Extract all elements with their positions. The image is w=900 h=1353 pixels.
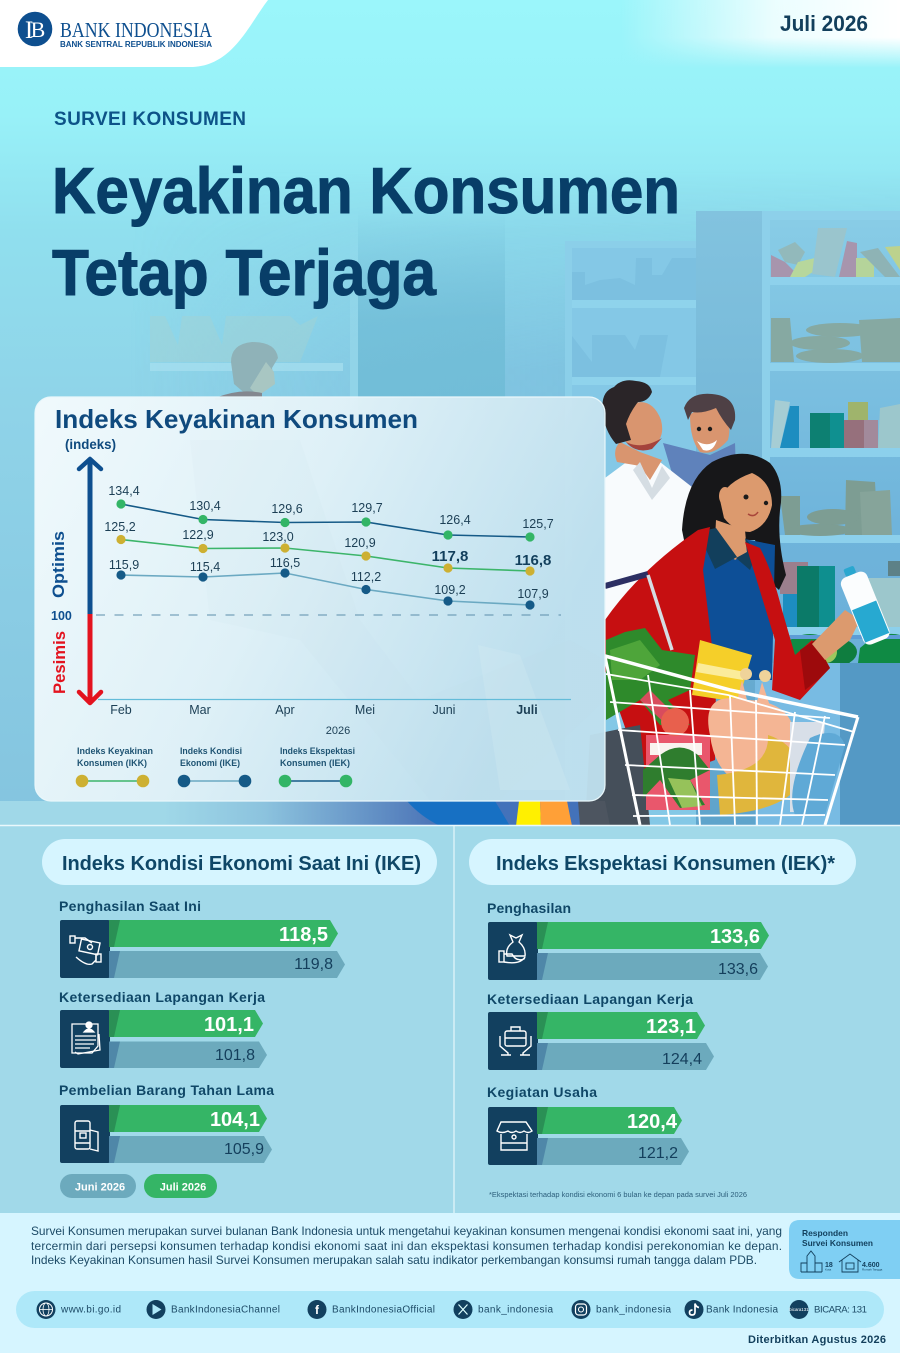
background illustration: faint left shelf and shopper <box>150 316 343 400</box>
man <box>602 380 737 640</box>
social bar: BICARA: 131 <box>814 1304 867 1316</box>
icon: tiktok <box>684 1300 704 1319</box>
description text: Survei Konsumen merupakan survei bulanan Bank Indonesia untuk mengetahui keyakinan konsumen mengenai kondisi ekonomi saat ini, yang <box>31 1224 782 1238</box>
series IKE: 115,9 <box>109 558 139 572</box>
shelf 1 goods <box>771 255 800 277</box>
groceries <box>606 628 845 815</box>
IEK heading: Indeks Ekspektasi Konsumen (IEK)* <box>496 853 835 875</box>
IKE item: Ketersediaan Lapangan Kerja: 101,1 <box>204 1014 254 1036</box>
IKE item: Ketersediaan Lapangan Kerja <box>59 989 267 1068</box>
month labels: Juni <box>433 703 455 717</box>
icon: facebook: f <box>315 1303 320 1317</box>
IKE item: Ketersediaan Lapangan Kerja: 101,8 <box>215 1047 255 1064</box>
background illustration: store shelves <box>350 210 900 848</box>
legend pills <box>60 1174 217 1198</box>
shelf 2 goods <box>771 318 794 362</box>
legend <box>76 746 355 787</box>
icon: facebook <box>308 1300 326 1319</box>
social bar: Bank Indonesia <box>706 1304 778 1316</box>
series IKK: 123,0 <box>262 530 294 544</box>
IKE item: Penghasilan Saat Ini: 118,5 <box>279 924 328 946</box>
header logo panel <box>0 0 268 67</box>
illustration: family shopping <box>0 380 892 826</box>
shelf 4 goods <box>780 496 800 535</box>
icon: city <box>801 1251 822 1272</box>
shelf 5 goods <box>780 562 808 594</box>
chart title: Indeks Keyakinan Konsumen <box>55 404 418 434</box>
description text: tercermin dari persepsi konsumen terhadap kondisi ekonomi saat ini dan ekspektasi konsumen terhadap kondisi perekonomian ke depan. <box>31 1239 782 1253</box>
IEK item: Penghasilan: Penghasilan <box>487 900 571 916</box>
series IEK: 129,7 <box>351 501 383 515</box>
woman hair <box>682 454 786 590</box>
page background <box>0 0 900 826</box>
series IKK <box>104 520 551 576</box>
IEK item: Kegiatan Usaha <box>487 1084 689 1165</box>
month labels: Apr <box>275 703 295 717</box>
respondent box: 18 <box>825 1262 833 1269</box>
series IEK: 126,4 <box>439 513 471 527</box>
IKE item: Pembelian Barang Tahan Lama: 104,1 <box>210 1109 260 1131</box>
footer background <box>0 1213 900 1353</box>
IEK item: Ketersediaan Lapangan Kerja: Ketersediaan Lapangan Kerja <box>487 991 693 1007</box>
woman face <box>719 473 772 532</box>
legend: Ekonomi (IKE) <box>180 758 240 768</box>
woman jacket <box>605 527 716 780</box>
month labels: 2026 <box>326 725 350 737</box>
IKE item: Pembelian Barang Tahan Lama <box>59 1082 274 1163</box>
IEK heading <box>469 839 856 885</box>
IEK item: Ketersediaan Lapangan Kerja <box>487 991 714 1070</box>
social bar: BankIndonesiaChannel <box>171 1304 280 1316</box>
icon: youtube <box>146 1300 166 1319</box>
pants <box>585 725 650 825</box>
month labels: Juli <box>516 703 538 717</box>
series IKE: 109,2 <box>434 583 466 597</box>
series IKK: 116,8 <box>515 552 551 569</box>
boy <box>684 394 735 453</box>
respondent box <box>789 1220 900 1279</box>
icon: refrigerator <box>75 1121 98 1151</box>
icon: website <box>36 1300 56 1319</box>
series IKK: 117,8 <box>432 548 468 565</box>
IEK item: Kegiatan Usaha: 120,4 <box>627 1111 678 1133</box>
chart card <box>35 397 605 801</box>
legend pills: Juli 2026 <box>160 1182 206 1194</box>
legend pills: Juni 2026 <box>75 1182 125 1194</box>
series IKE: 115,4 <box>190 560 220 574</box>
date: Juli 2026 <box>780 11 868 36</box>
main title: Keyakinan Konsumen <box>52 154 680 227</box>
logo mark <box>18 12 52 46</box>
social bar: bank_indonesia <box>478 1304 553 1316</box>
panel: IEK <box>469 839 856 1199</box>
top right glow <box>620 0 900 68</box>
icon: money in hand <box>70 936 101 964</box>
IEK item: Penghasilan: 133,6 <box>718 961 758 978</box>
icon: document <box>72 1022 100 1054</box>
IEK item: Penghasilan <box>487 900 769 980</box>
IKE heading <box>42 839 437 885</box>
main title: Tetap Terjaga <box>52 236 437 309</box>
IKE item: Pembelian Barang Tahan Lama: 105,9 <box>224 1141 264 1158</box>
lower panel background <box>0 826 900 1214</box>
produce row <box>790 634 850 663</box>
line chart: Pesimis <box>51 631 69 694</box>
legend: Konsumen (IKK) <box>77 758 147 768</box>
respondent box: Rumah Tangga <box>862 1268 883 1272</box>
header logo panel: BANK SENTRAL REPUBLIK INDONESIA <box>60 40 212 49</box>
IKE item: Penghasilan Saat Ini: 119,8 <box>294 956 333 973</box>
line chart: 100 <box>51 609 72 623</box>
icon: money bag <box>499 935 525 963</box>
respondent box: 4.600 <box>862 1262 880 1269</box>
month labels <box>110 703 538 737</box>
series IKK: 120,9 <box>344 536 376 550</box>
series IEK: 129,6 <box>271 502 303 516</box>
icon: house <box>839 1254 861 1272</box>
IKE item: Ketersediaan Lapangan Kerja: Ketersediaan Lapangan Kerja <box>59 989 265 1005</box>
legend: Indeks Keyakinan <box>77 746 153 756</box>
axis unit: (indeks) <box>65 437 116 452</box>
counter <box>840 663 900 830</box>
description text: Indeks Keyakinan Konsumen hasil Survei Konsumen merupakan salah satu indikator perkembangan konsumsi rumah tangga dalam PDB. <box>31 1253 757 1267</box>
respondent box: Kota <box>825 1268 832 1272</box>
respondent box: Survei Konsumen <box>802 1238 873 1248</box>
respondent box: Responden <box>802 1228 848 1238</box>
legend: Indeks Ekspektasi <box>280 746 355 756</box>
series IEK <box>108 484 554 542</box>
IKE item: Pembelian Barang Tahan Lama: Pembelian Barang Tahan Lama <box>59 1082 274 1098</box>
social bar <box>16 1291 884 1328</box>
social bar: www.bi.go.id <box>60 1304 121 1316</box>
icon: storefront <box>497 1122 532 1150</box>
main title <box>52 154 680 309</box>
series IKE: 116,5 <box>270 556 300 570</box>
line chart: Optimis <box>50 531 68 598</box>
shelf 3 goods <box>771 400 790 448</box>
IEK item: Penghasilan: 133,6 <box>710 926 760 948</box>
panel: IKE <box>42 839 437 1198</box>
social bar: bank_indonesia <box>596 1304 671 1316</box>
icon: bicara <box>789 1300 809 1319</box>
month labels: Mei <box>355 703 375 717</box>
month labels: Feb <box>110 703 132 717</box>
logo mark: B <box>31 17 45 42</box>
series IKE <box>109 556 549 610</box>
cart basket <box>605 656 858 825</box>
icon: x <box>454 1300 472 1319</box>
series IKE: 107,9 <box>517 587 549 601</box>
items below the chart card <box>0 801 610 826</box>
series IKK: 122,9 <box>182 528 214 542</box>
IKE item: Penghasilan Saat Ini: Penghasilan Saat Ini <box>59 898 201 914</box>
IEK item: Kegiatan Usaha: 121,2 <box>638 1145 678 1162</box>
IEK item: Ketersediaan Lapangan Kerja: 124,4 <box>662 1051 702 1068</box>
IKE heading: Indeks Kondisi Ekonomi Saat Ini (IKE) <box>62 853 421 875</box>
series IEK: 125,7 <box>522 517 554 531</box>
description text <box>31 1224 782 1267</box>
kicker: SURVEI KONSUMEN <box>54 109 246 130</box>
line chart <box>50 459 571 737</box>
IEK item: Kegiatan Usaha: Kegiatan Usaha <box>487 1084 597 1100</box>
cart handle <box>605 574 648 586</box>
series IEK: 130,4 <box>189 499 221 513</box>
series IKE: 112,2 <box>351 570 381 584</box>
legend: Konsumen (IEK) <box>280 758 350 768</box>
bottle <box>836 562 892 647</box>
axis arrow <box>79 459 101 703</box>
woman shirt and neck <box>698 530 775 680</box>
series IEK: 134,4 <box>108 484 140 498</box>
month labels: Mar <box>189 703 211 717</box>
series IKK: 125,2 <box>104 520 136 534</box>
publication note: Diterbitkan Agustus 2026 <box>748 1334 886 1346</box>
IEK item: Ketersediaan Lapangan Kerja: 123,1 <box>646 1016 696 1038</box>
IKE item: Penghasilan Saat Ini <box>59 898 345 978</box>
bank name: BANK INDONESIA <box>60 18 213 42</box>
social bar: BankIndonesiaOfficial <box>332 1304 435 1316</box>
icon: bicara: bicara131 <box>789 1307 809 1312</box>
icon: instagram <box>572 1300 590 1319</box>
faint ghost shopper in card <box>190 440 605 800</box>
logo mark: I <box>25 17 33 44</box>
legend: Indeks Kondisi <box>180 746 242 756</box>
footnote: *Ekspektasi terhadap kondisi ekonomi 6 bulan ke depan pada survei Juli 2026 <box>489 1192 747 1199</box>
icon: hands and briefcase <box>500 1027 531 1055</box>
